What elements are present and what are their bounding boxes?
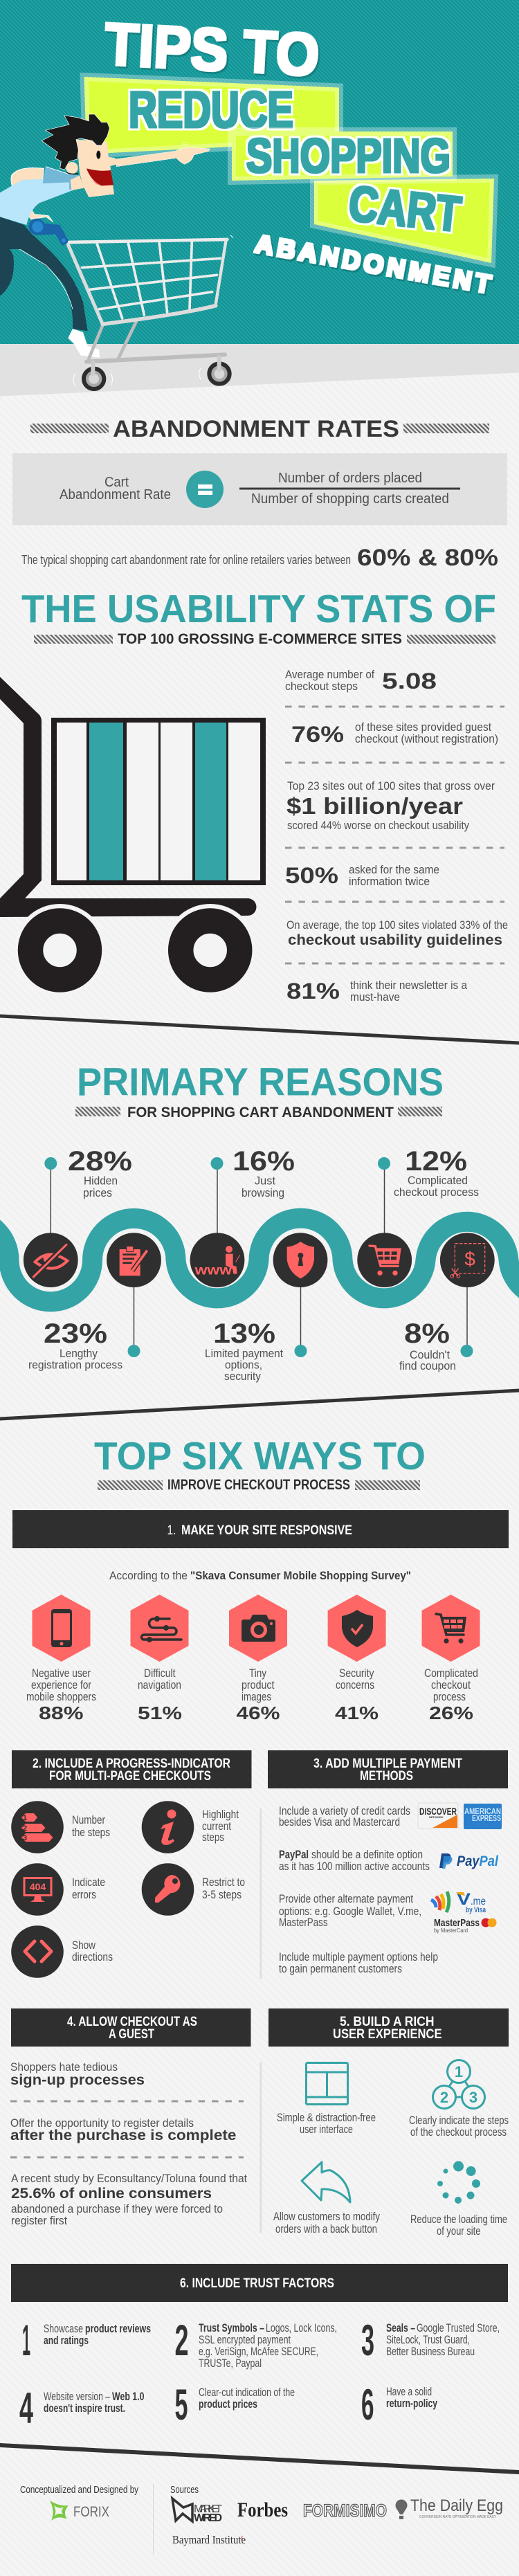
stat: product images: 46% [237,1703,280,1723]
panel: 6 trust factors [11,2264,508,2433]
reason: complicated checkout: 12% [405,1146,467,1177]
factor 3: Seals – [386,2321,415,2334]
tip: highlight current steps: current [202,1820,231,1833]
stat: guidelines [286,918,508,948]
stat: security: 41% [335,1703,379,1723]
text: alternate payment: options: e.g. Google Wallet, V.me, [279,1905,421,1918]
logo: discover card: DISCOVER [419,1806,457,1817]
panel: 3 payment methods [268,1750,508,1975]
tip: loading time [410,2161,507,2238]
logo: google wallet [431,1892,449,1912]
reason: complicated checkout [357,1146,479,1287]
stat: mobile shoppers: experience for [31,1678,91,1691]
factor 4 [19,2384,144,2433]
stat: mobile shoppers [26,1595,96,1723]
text: survey intro: According to the [109,1569,188,1582]
tip: back button [273,2162,380,2235]
bar: 6 heading: 6. INCLUDE TRUST FACTORS [180,2276,334,2291]
bar: 4 heading: 4. ALLOW CHECKOUT AS [67,2015,197,2029]
reason: complicated checkout: Complicated [408,1174,468,1187]
tip: simple interface: user interface [300,2123,353,2136]
illustration: man pushing cart [0,114,234,389]
panel: formula [12,453,507,525]
factor 3: SiteLock, Trust Guard, [386,2333,470,2346]
factor 1 [22,2316,151,2365]
stat: newsletter: must-have [350,990,400,1004]
yellow banner: cart [314,176,494,263]
stat: product images: images [242,1690,271,1703]
tip: highlight current steps [142,1801,239,1853]
yellow banner: reduce: REDUCE [129,81,293,138]
reason: coupon: 8% [404,1318,450,1349]
credit: sources [170,2484,503,2546]
stat: newsletter: think their newsletter is a [350,979,467,992]
yellow banner: shopping: SHOPPING [246,129,450,183]
stat: navigation: Difficult [144,1667,176,1680]
stat: asked twice: information twice [349,875,430,888]
bar: 1 make your site responsive: MAKE YOUR SITE RESPONSIVE [181,1523,352,1538]
icon: camera [242,1615,275,1642]
tip: back button: orders with a back button [275,2222,377,2235]
logo: v.me by visa: .me [471,1896,486,1907]
tip: indicate errors [11,1863,105,1916]
reason: lengthy registration [28,1233,161,1372]
panel: formula: Cart [104,475,129,490]
factor 6: 6 [361,2381,374,2429]
panel: 2 progress indicator [11,1750,251,1978]
reason: just browsing: Just [255,1174,275,1188]
icon: navigation path [141,1616,181,1642]
reason: limited payment: options, [225,1358,262,1372]
logo: american express [464,1804,502,1829]
stat: newsletter: 81% [286,979,340,1004]
icon: equals [186,471,224,508]
reason: limited payment [205,1233,327,1383]
stat: asked twice: 50% [285,863,338,888]
stat: mobile shoppers: Negative user [32,1667,91,1680]
stat: complicated checkout: process [433,1690,466,1703]
logo: v.me by visa [456,1890,486,1914]
tip: show directions: Show [72,1939,96,1952]
bar: 2 heading: 2. INCLUDE A PROGRESS-INDICATOR [33,1757,230,1771]
text: econsultancy study: register first [11,2214,67,2227]
factor 2: TRUSTe, Paypal [199,2357,262,2370]
factor 3: Better Business Bureau [386,2345,475,2358]
stat: guest checkout: of these sites provided guest [355,720,491,734]
reason: limited payment: Limited payment [205,1347,283,1360]
reason: coupon: Couldn't [410,1348,450,1361]
stat: one billion [286,779,495,832]
stat: asked twice [285,863,439,888]
section: top six ways [12,1434,509,1723]
factor 5 [174,2381,295,2429]
factor 4: doesn't inspire trust. [44,2402,125,2415]
stat: average steps: checkout steps [285,680,358,693]
bar: 5 heading: 5. BUILD A RICH [340,2015,435,2029]
credit: designed by forix: Conceptualized and Designed by [20,2484,138,2496]
tip: indicate errors: errors [72,1888,96,1901]
logo: discover card [418,1803,458,1829]
logo: formisimo: FORMISIMO [303,2501,387,2521]
panel: formula: Number of shopping carts created [251,491,449,507]
bar: 6 heading [11,2264,508,2302]
tip: show directions: directions [72,1950,113,1963]
reason: hidden prices [24,1146,132,1287]
stat: security [328,1595,386,1723]
factor 3: 3 [361,2316,374,2365]
icon: hidden eye [33,1244,67,1277]
tip: number the steps: the steps [72,1826,110,1839]
icon: coupon scissors: $ [464,1249,475,1270]
title: tips to: TIPS TO [103,11,321,89]
stat: navigation: navigation [138,1678,181,1691]
text: sign-up processes [10,2060,145,2088]
reason: hidden prices: 28% [68,1146,132,1177]
bar: 2 heading [12,1750,252,1788]
text: paypal: should be a definite option [311,1848,423,1861]
logo: the daily egg [396,2496,503,2519]
text: multiple options: to gain permanent customers [279,1962,402,1975]
logo: discover card: NETWORK [429,1815,444,1819]
text: paypal: PayPal [279,1848,309,1861]
credit: designed by forix: FORIX [73,2504,109,2520]
stat: product images: Tiny [249,1667,266,1680]
stat: asked twice: asked for the same [349,863,439,876]
stat: guidelines: checkout usability guidelines [288,932,502,948]
logo: paypal [439,1853,499,1869]
logo: paypal: PayPal [457,1853,499,1869]
stat: one billion: scored 44% worse on checkout usability [287,819,469,832]
stat: average steps [285,668,437,693]
bar: 5 heading [268,2008,509,2047]
factor 4: Website version – [44,2390,110,2403]
yellow banner: reduce [84,77,339,154]
heading: primary reasons: PRIMARY REASONS [77,1060,444,1105]
tip: restrict steps: 3-5 steps [202,1888,242,1901]
factor 2: 2 [174,2316,188,2365]
section: usability stats [0,587,508,1004]
tip: back button: Allow customers to modify [273,2210,380,2223]
stat: newsletter [286,979,467,1004]
hero banner [0,0,519,396]
tip: highlight current steps: Highlight [202,1808,239,1821]
credit: sources: Sources [170,2484,199,2496]
logo: market wired: MARKET [194,2503,222,2515]
factor 2 [174,2316,337,2370]
factor 1: and ratings [44,2334,89,2347]
text: alternate payment: Provide other alternate payment [279,1892,413,1905]
tip: indicate errors: 404 [30,1881,46,1892]
stat: guest checkout [291,720,498,747]
stat: one billion: $1 billion/year [286,793,463,819]
factor 4: Web 1.0 [112,2390,144,2403]
text: multiple options [279,1950,438,1975]
reason: coupon [399,1233,495,1372]
tip: indicate checkout steps: 2 [440,2089,448,2106]
logo: the daily egg: The Daily Egg [410,2496,503,2515]
section: abandonment rates [12,416,507,571]
stat: mobile shoppers: mobile shoppers [26,1690,96,1703]
factor 6: Have a solid [386,2385,432,2398]
reason: lengthy registration: registration process [28,1358,122,1372]
bar: 1 make your site responsive: 1. [167,1523,176,1538]
stat: complicated checkout: 26% [429,1703,473,1723]
text: econsultancy study: 25.6% of online consumers [11,2186,212,2202]
chart: wave timeline [0,1218,519,1302]
tip: simple interface: Simple & distraction-free [277,2111,376,2124]
factor 1: 1 [22,2316,30,2365]
text: alternate payment [279,1892,421,1929]
subheading: improve checkout process: IMPROVE CHECKOUT PROCESS [167,1477,350,1493]
text: paypal: as it has 100 million active accounts [279,1860,430,1873]
text: credit cards: Include a variety of credit cards [279,1804,410,1817]
tip: simple interface [277,2062,376,2136]
tip: loading time: of your site [437,2224,480,2238]
yellow banner: cart: CART [346,176,464,243]
text: credit cards: besides Visa and Mastercard [279,1815,400,1829]
text: after the purchase: after the purchase is complete [10,2128,237,2143]
tip: indicate errors: Indicate [72,1876,105,1889]
bar: 3 heading: METHODS [360,1769,413,1784]
tip: number the steps: 1 [23,1814,27,1822]
text: typical rate [21,545,498,571]
logo: american express: AMERICAN [464,1808,501,1816]
text: sign-up processes: Shoppers hate tedious [10,2060,118,2074]
stat: complicated checkout: checkout [431,1678,471,1691]
subheading: top 100 sites: TOP 100 GROSSING E-COMMERCE SITES [118,631,402,647]
stat: guest checkout: checkout (without registration) [355,732,498,745]
text: typical rate: The typical shopping cart abandonment rate for online retailers varies between [21,553,351,567]
factor 2: e.g. VeriSign, McAfee SECURE, [199,2345,318,2358]
factor 2: Logos, Lock Icons, [266,2321,337,2334]
text: after the purchase [10,2116,237,2143]
tip: restrict steps [142,1863,245,1916]
factor 3 [361,2316,500,2365]
reason: complicated checkout: checkout process [394,1186,479,1199]
logo: v.me by visa: by Visa [466,1906,486,1914]
subheading: top 100 sites [34,631,495,647]
heading: top six ways to: TOP SIX WAYS TO [94,1434,426,1478]
icon: cart [370,1246,401,1276]
text: sign-up processes: sign-up processes [10,2072,145,2088]
text: multiple options: Include multiple payment options help [279,1950,438,1963]
stat: product images [229,1595,287,1723]
tip: show directions [11,1925,113,1978]
factor 6 [361,2381,437,2429]
bar: 5 heading: USER EXPERIENCE [333,2027,441,2042]
tip: highlight current steps: steps [202,1831,224,1844]
text: credit cards [279,1804,410,1829]
logo: the daily egg: CONVERSION RATE OPTIMIZATION MADE EASY [419,2515,497,2519]
factor 1: product reviews [85,2322,151,2335]
stat: average steps: 5.08 [382,669,437,693]
factor 2: SSL encrypted payment [199,2333,291,2346]
factor 1: Showcase [44,2322,83,2335]
stat: navigation [130,1595,188,1723]
tip: number the steps: Number [72,1813,105,1826]
panel: formula: Abandonment Rate [60,487,171,502]
illustration: large cart [0,677,266,997]
stat: product images: product [242,1678,275,1691]
icon: clipboard [120,1246,147,1276]
text: after the purchase: Offer the opportunity to register details [10,2116,194,2130]
reason: hidden prices: Hidden [84,1174,118,1188]
stat: security: Security [339,1667,374,1680]
reason: just browsing [190,1146,295,1287]
logo: masterpass: by MasterCard [434,1927,468,1934]
factor 2: Trust Symbols – [199,2321,264,2334]
reason: hidden prices: prices [83,1186,112,1199]
reason: coupon: find coupon [399,1359,456,1372]
logo: masterpass: MasterPass [434,1917,480,1929]
footer: credits [20,2484,503,2555]
logo: masterpass [434,1917,497,1934]
reason: just browsing: browsing [242,1186,284,1199]
heading: abandonment rates [30,416,489,442]
reason: limited payment: security [224,1370,261,1383]
tip: number the steps: 2 [23,1824,27,1833]
stat: one billion: Top 23 sites out of 100 sites that gross over [287,779,495,792]
text: survey intro [109,1569,411,1582]
text: econsultancy study: abandoned a purchase if they were forced to [11,2202,223,2215]
text: typical rate: 60% & 80% [357,545,498,571]
stat: complicated checkout: Complicated [424,1667,478,1680]
stat: guest checkout: 76% [291,722,344,747]
panel: 5 user experience [268,2008,509,2238]
heading: the usability stats of: THE USABILITY STATS OF [21,587,496,631]
factor 5: Clear-cut indication of the [199,2386,295,2399]
logo: market wired [172,2498,222,2524]
heading: abandonment rates: ABANDONMENT RATES [113,416,399,442]
icon: phone [51,1609,72,1647]
stat: average steps: Average number of [285,668,374,681]
tip: indicate checkout steps: 1 [455,2063,463,2080]
tip: number the steps [11,1801,110,1853]
text: econsultancy study [11,2172,247,2227]
text: econsultancy study: A recent study by Econsultancy/Toluna found that [11,2172,247,2185]
title: abandonment: ABANDONMENT [253,230,493,299]
stat: navigation: 51% [138,1703,182,1723]
stat: complicated checkout [422,1595,480,1723]
section: primary reasons [0,1060,519,1383]
credit: designed by forix [20,2484,138,2521]
tip: number the steps: 3 [23,1834,27,1842]
bar: 2 heading: FOR MULTI-PAGE CHECKOUTS [49,1769,211,1784]
reason: just browsing: 16% [233,1146,295,1177]
factor 5: product prices [199,2397,257,2411]
reason: limited payment: 13% [213,1318,275,1349]
factor 4: 4 [19,2384,33,2433]
panel: formula: Number of orders placed [278,471,422,486]
text: paypal [279,1848,430,1873]
panel: 4 guest checkout [10,2008,251,2227]
factor 5: 5 [174,2381,188,2429]
stat: mobile shoppers: 88% [39,1703,83,1723]
reason: lengthy registration: Lengthy [60,1347,98,1360]
tip: indicate checkout steps [409,2060,509,2139]
icon: www user: www [194,1264,233,1278]
logo: baymard institute: Baymard Institute [172,2533,246,2546]
icon: coupon scissors [450,1244,485,1278]
icon: www user [194,1246,240,1278]
tip: restrict steps: Restrict to [202,1876,245,1889]
logo: forbes: Forbes [237,2498,288,2521]
stat: security: concerns [336,1678,374,1691]
icon: shield check [342,1610,373,1647]
bar: 4 heading: A GUEST [109,2027,154,2042]
logo: market wired: WIRED [194,2512,222,2524]
bar: 3 heading: 3. ADD MULTIPLE PAYMENT [313,1757,462,1771]
text: alternate payment: MasterPass [279,1916,328,1929]
text: survey intro: "Skava Consumer Mobile Shopping Survey" [190,1569,411,1582]
tip: indicate checkout steps: 3 [469,2089,477,2106]
bar: 1 make your site responsive [12,1510,509,1548]
logo: v.me by visa: V [457,1890,471,1909]
bar: 4 heading [11,2008,251,2047]
reason: lengthy registration: 23% [44,1318,107,1349]
bar: 3 heading [268,1750,508,1788]
logo: american express: EXPRESS [472,1815,501,1823]
subheading: for shopping cart abandonment: FOR SHOPPING CART ABANDONMENT [127,1105,394,1121]
icon: security shield [287,1242,314,1278]
icon: cart [436,1614,466,1644]
factor 6: return-policy [386,2397,437,2410]
